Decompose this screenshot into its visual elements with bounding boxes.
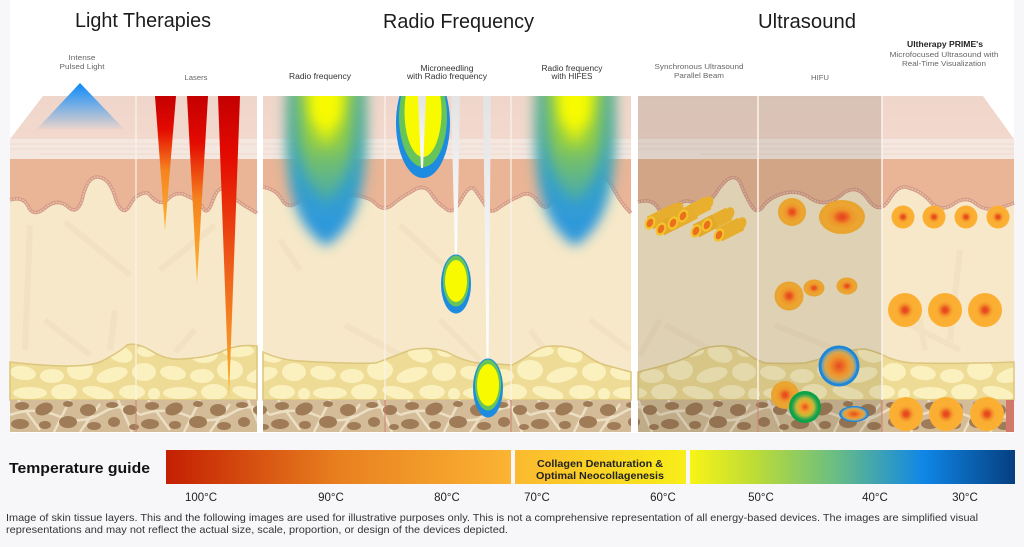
label: Radio frequency with HIFES: Radio frequency — [542, 64, 602, 73]
heading: Light Therapies: Light Therapies — [75, 10, 211, 32]
label: Microneedling with Radio frequency: with Radio frequency — [406, 72, 487, 81]
label: Synchronous Ultrasound Parallel Beam: Parallel Beam — [674, 71, 724, 80]
disclaimer text: representations and may not reflect the actual size, scale, proportion, or design of the devices depicted. — [6, 524, 508, 536]
bar segment: collagen denaturation — [515, 450, 686, 484]
laser beam medium — [187, 96, 208, 283]
temperature scale labels: 40°C — [862, 492, 888, 504]
label: Ultherapy PRIME's: Microfocused Ultrasound with — [890, 50, 998, 59]
needle shallow — [418, 96, 426, 168]
label: Ultherapy PRIME's — [890, 40, 998, 68]
panel: light therapies skin — [10, 96, 257, 432]
radio frequency heat plume — [285, 60, 367, 246]
temperature scale labels: 30°C — [952, 492, 978, 504]
label: Lasers: Lasers — [184, 73, 208, 82]
temperature scale labels — [185, 492, 978, 504]
temperature scale labels: 90°C — [318, 492, 344, 504]
laser beam long — [218, 96, 240, 398]
bar segment: high heat — [166, 450, 511, 484]
laser beams — [155, 96, 240, 398]
temperature scale labels: 100°C — [185, 492, 217, 504]
label: Synchronous Ultrasound Parallel Beam — [654, 62, 744, 80]
callout: optimal range: Collagen Denaturation & — [537, 458, 663, 470]
disclaimer text — [6, 512, 978, 536]
label: HIFU: HIFU — [811, 73, 829, 82]
label: Intense Pulsed Light: Intense — [68, 53, 96, 62]
HIFU heat points — [771, 198, 869, 423]
radio frequency with HIFES heat plume — [534, 60, 616, 246]
icon: intense pulsed light triangle — [37, 83, 124, 129]
label: Ultherapy PRIME's: Ultherapy PRIME's — [907, 40, 984, 49]
callout: optimal range: Optimal Neocollagenesis — [536, 470, 664, 482]
label: Radio frequency with HIFES: with HIFES — [550, 72, 592, 81]
label: Microneedling with Radio frequency: Microneedling — [420, 64, 474, 73]
heat zone middle — [441, 254, 471, 314]
label: Intense Pulsed Light — [60, 53, 105, 71]
Ultherapy PRIME heat points — [888, 206, 1010, 431]
label: Microneedling with Radio frequency — [406, 64, 487, 81]
needle middle — [451, 96, 460, 256]
temperature scale labels: 60°C — [650, 492, 676, 504]
laser beam short — [155, 96, 176, 230]
heat zone shallow — [396, 96, 450, 178]
bar segment: low heat — [690, 450, 1015, 484]
needle deep — [483, 96, 491, 360]
callout: optimal range — [536, 458, 664, 482]
temperature scale labels: 50°C — [748, 492, 774, 504]
heading: Temperature guide: Temperature guide — [9, 460, 150, 477]
label: Radio frequency: Radio frequency — [289, 72, 351, 81]
label: Ultherapy PRIME's: Real-Time Visualization — [902, 59, 986, 68]
label: Radio frequency with HIFES — [542, 64, 602, 81]
panel: ultrasound skin — [638, 96, 1014, 432]
microneedling needles and heat zones — [396, 67, 503, 418]
panel: radio frequency skin — [263, 96, 631, 432]
label: Intense Pulsed Light: Pulsed Light — [60, 62, 105, 71]
disclaimer text: Image of skin tissue layers. This and the following images are used for illustrative purposes only. This is not a comprehensive representation of all energy-based devices. The images are simplified visual — [6, 512, 978, 524]
heading: Ultrasound: Ultrasound — [758, 11, 856, 33]
temperature bar — [166, 450, 1015, 484]
label: Synchronous Ultrasound Parallel Beam: Synchronous Ultrasound — [654, 62, 744, 71]
heading: Radio Frequency: Radio Frequency — [383, 11, 534, 33]
temperature scale labels: 70°C — [524, 492, 550, 504]
collagen cylinders: parallel beam — [643, 195, 748, 243]
heat zone deep — [473, 358, 503, 418]
temperature scale labels: 80°C — [434, 492, 460, 504]
